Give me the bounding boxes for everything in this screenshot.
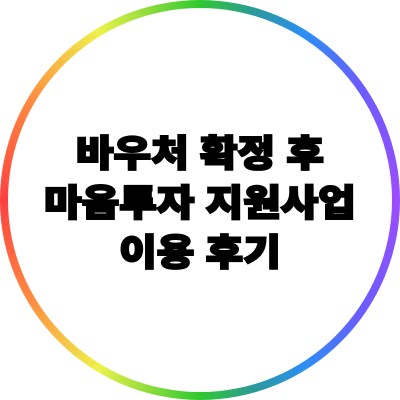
title: 바우처 확정 후 (76, 134, 324, 175)
title (44, 134, 356, 273)
title: 마음투자 지원사업 (44, 183, 356, 224)
title: 이용 후기 (119, 233, 281, 273)
